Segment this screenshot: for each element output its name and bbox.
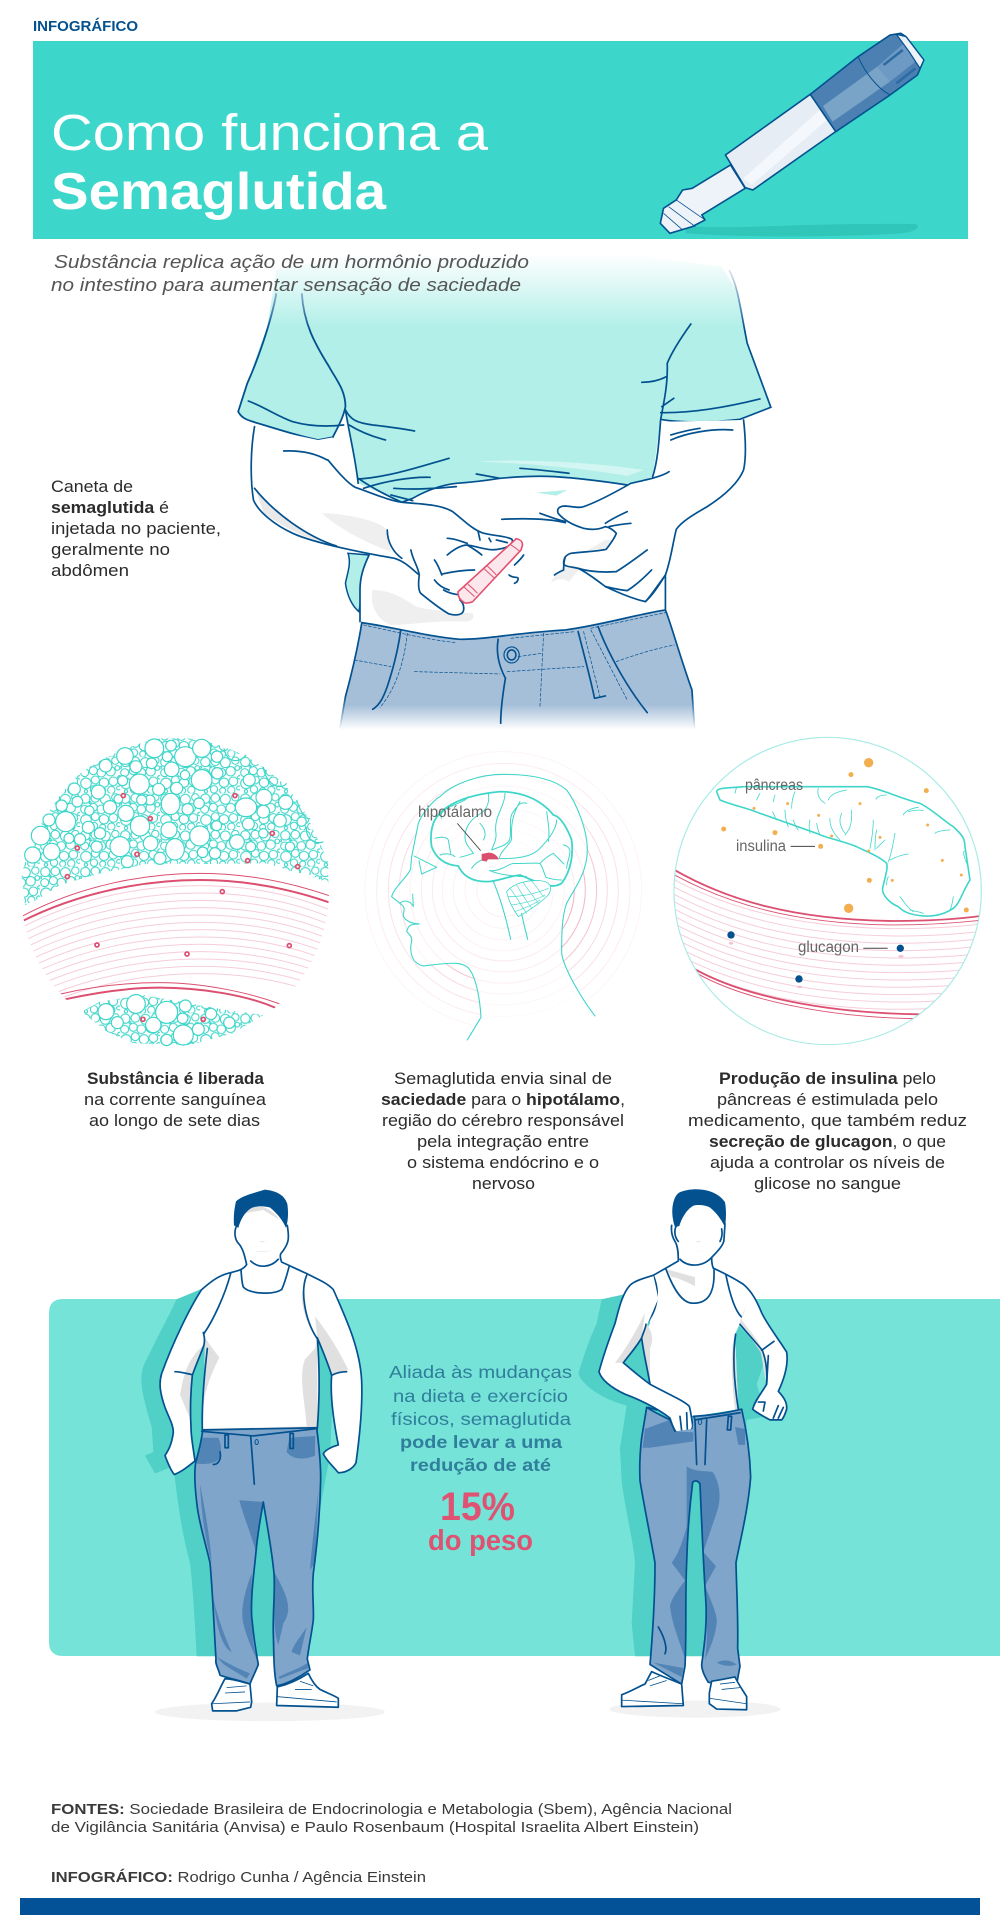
panel text: aliada: físicos, semaglutida (391, 1409, 571, 1429)
right arm and hand (502, 420, 745, 602)
caption: semaglutida sinal: pela integração entre (417, 1133, 589, 1151)
signal rings (365, 752, 642, 1028)
body shadow (141, 1277, 333, 1656)
panel: pancreas circle (673, 737, 983, 1053)
subtitle: Substância replica ação de um hormônio produzido (54, 251, 529, 272)
hypothalamus (482, 853, 499, 862)
hair (672, 1189, 726, 1227)
shoes (622, 1672, 747, 1710)
title (51, 104, 489, 221)
eye and nose details (400, 856, 437, 907)
sources (51, 1801, 732, 1836)
sources: FONTES: Sociedade Brasileira de Endocrinologia e Metabologia (Sbem), Agência Nacional (51, 1801, 732, 1818)
caption: substância (84, 1070, 267, 1130)
caption: produção de insulina: Produção de insulina pelo (719, 1070, 936, 1088)
body shadow (578, 1284, 767, 1656)
semaglutide particles (65, 794, 300, 1021)
caption: produção de insulina: medicamento, que também reduz (688, 1112, 967, 1130)
caption: produção de insulina: ajuda a controlar os níveis de (710, 1154, 945, 1172)
illustration: man after (578, 1189, 787, 1718)
shirt (238, 253, 771, 502)
head outline (392, 774, 595, 1040)
jeans (340, 610, 694, 730)
left arm and hand (251, 427, 524, 615)
header panel (33, 33, 968, 239)
hair (234, 1190, 288, 1228)
vessel (673, 869, 983, 1053)
labels: pancreas, insulin and glucagon (736, 777, 859, 956)
torso and head (642, 1206, 743, 1416)
caption: semaglutida sinal: região do cérebro responsável (382, 1112, 624, 1130)
footer bar (20, 1898, 980, 1915)
text: caneta: abdômen (51, 562, 129, 580)
caption: substância: Substância é liberada (87, 1070, 265, 1088)
label: hipotálamo: hipotálamo (418, 804, 492, 821)
subtitle (51, 251, 529, 295)
label: infográfico: INFOGRÁFICO (33, 18, 138, 35)
caption: produção de insulina: pâncreas é estimulada pelo (717, 1091, 938, 1109)
blood vessel (20, 873, 330, 1016)
glucagon dots (727, 931, 904, 988)
panel: bloodstream circle (20, 738, 330, 1046)
insulin dots (721, 758, 969, 913)
stat: 15% do peso: 15% (440, 1485, 515, 1529)
caption: substância: na corrente sanguínea (84, 1091, 267, 1109)
caption: semaglutida sinal (381, 1070, 625, 1193)
cerebellum and brainstem (493, 881, 551, 939)
stat: 15% do peso (428, 1485, 533, 1557)
pancreas (717, 787, 970, 916)
illustration: man before (141, 1190, 385, 1721)
caption: substância: ao longo de sete dias (89, 1112, 260, 1130)
title: Semaglutida (51, 163, 387, 221)
text: caneta: semaglutida é (51, 499, 169, 517)
caption: produção de insulina: glicose no sangue (754, 1175, 901, 1193)
panel: brain and head (365, 752, 642, 1040)
text: caneta: geralmente no (51, 541, 170, 559)
right arm (713, 1268, 787, 1420)
floor shadow (609, 1701, 781, 1718)
panel text: aliada: redução de até (410, 1455, 551, 1475)
brain (431, 792, 572, 886)
caption: semaglutida sinal: Semaglutida envia sinal de (394, 1070, 612, 1088)
jeans (640, 1407, 751, 1684)
leader lines (791, 846, 888, 948)
panel text: aliada: pode levar a uma (400, 1432, 562, 1452)
panel: weight result background (49, 1299, 1000, 1656)
subtitle: no intestino para aumentar sensação de saciedade (51, 274, 521, 295)
labels: pancreas, insulin and glucagon: insulina (736, 838, 786, 855)
stat: 15% do peso: do peso (428, 1525, 533, 1557)
credit: INFOGRÁFICO: Rodrigo Cunha / Agência Einstein (51, 1869, 426, 1886)
panel text: aliada (389, 1362, 572, 1475)
title: Como funciona a (51, 104, 489, 161)
jeans (195, 1428, 321, 1686)
left arm (599, 1275, 693, 1432)
panel text: aliada: na dieta e exercício (393, 1386, 568, 1406)
belly (360, 483, 671, 639)
icon: pen in hand (458, 539, 523, 603)
text: caneta: Caneta de (51, 478, 133, 496)
sources: de Vigilância Sanitária (Anvisa) e Paulo Rosenbaum (Hospital Israelita Albert Einstein) (51, 1819, 699, 1836)
caption: semaglutida sinal: saciedade para o hipotálamo , (381, 1091, 625, 1109)
illustration: patient injecting pen in abdomen (238, 253, 771, 730)
labels: pancreas, insulin and glucagon: glucagon (798, 939, 859, 956)
caption: semaglutida sinal: o sistema endócrino e o (407, 1154, 599, 1172)
caption: produção de insulina (688, 1070, 967, 1193)
text: caneta: injetada no paciente, (51, 520, 221, 538)
text: caneta (51, 478, 221, 580)
shirt back (345, 553, 369, 612)
hypothalamus leader line (457, 823, 481, 851)
icon: injection pen (660, 33, 924, 236)
floor shadow (155, 1703, 385, 1721)
torso, head and arms (160, 1206, 362, 1475)
caption: produção de insulina: secreção de glucagon , o que (709, 1133, 946, 1151)
bubbles: fat tissue (22, 738, 328, 1046)
caption: semaglutida sinal: nervoso (472, 1175, 535, 1193)
panel text: aliada: Aliada às mudanças (389, 1362, 572, 1382)
labels: pancreas, insulin and glucagon: pâncreas (745, 777, 803, 794)
shoes (212, 1673, 338, 1711)
